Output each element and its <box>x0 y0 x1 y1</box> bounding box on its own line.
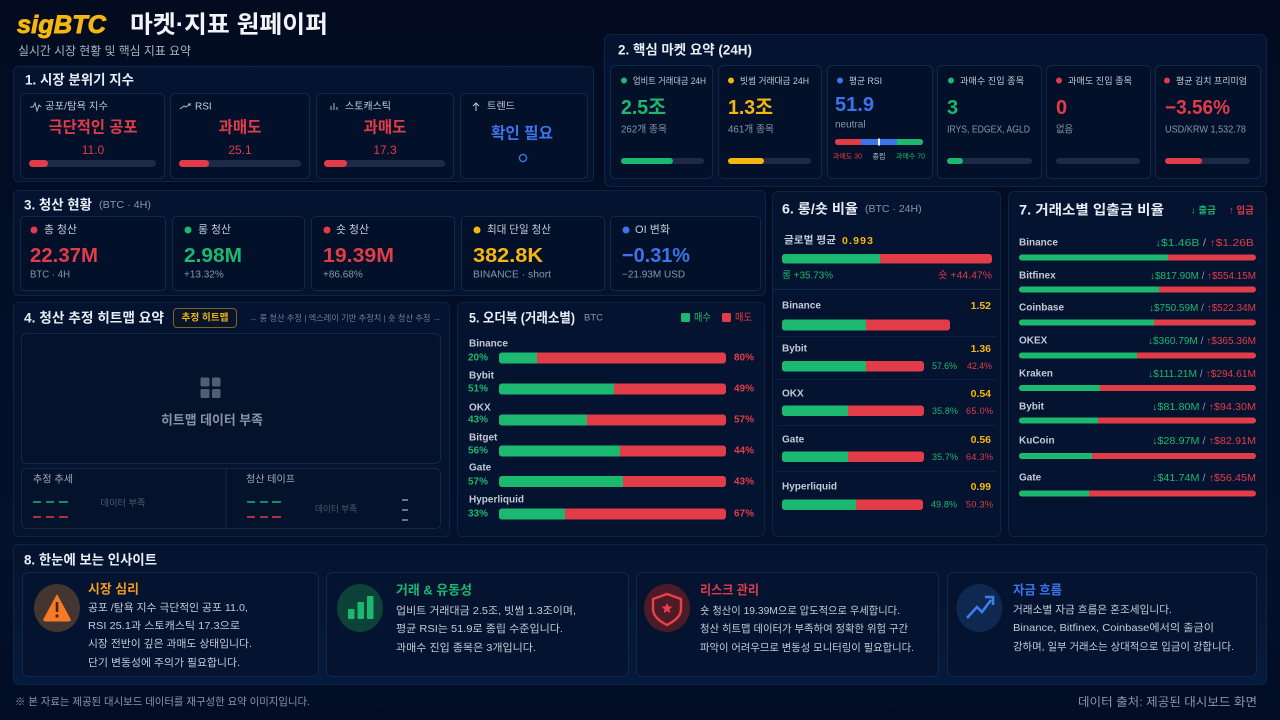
card: short liquidation <box>312 216 454 290</box>
card: largest single liquidation: BINANCE · short <box>473 270 551 280</box>
row: OKX: OKX <box>782 388 804 400</box>
logo: sigBTC <box>17 11 107 39</box>
card: overbought entries: IRYS, EDGEX, AGLD <box>947 124 1030 136</box>
card: upbit volume: 업비트 거래대금 24H <box>633 76 706 86</box>
row: OKEX <box>1019 336 1256 358</box>
card: RSI: 과매도 <box>218 118 262 136</box>
row: Hyperliquid <box>468 494 754 520</box>
card: trend <box>460 94 588 178</box>
row: Gate: 43% <box>734 476 754 488</box>
panel: estimated trend and liquidation tape: 데이터 부족 <box>315 504 357 514</box>
heading: section 2: 2. 핵심 마켓 요약 (24H) <box>618 42 752 58</box>
row: Bitfinex: Bitfinex <box>1019 270 1056 282</box>
card: stochastic: 과매도 <box>364 118 407 136</box>
footer source: 데이터 출처: 제공된 대시보드 화면 <box>1078 695 1257 709</box>
panel: market mood index <box>14 66 594 182</box>
card: fund flow <box>948 572 1256 676</box>
card: short liquidation: 숏 청산 <box>336 223 369 236</box>
heading: section 3 <box>24 198 151 212</box>
panel: estimated trend and liquidation tape <box>22 468 440 528</box>
row: Coinbase: ↓$750.59M / ↑$522.34M <box>1149 302 1256 314</box>
card: trading and liquidity: 거래 & 유동성 <box>396 582 472 598</box>
row: Hyperliquid: 0.99 <box>971 481 991 493</box>
row: Binance: 1.52 <box>971 300 991 312</box>
row: Hyperliquid: 67% <box>734 508 754 520</box>
row: Bybit: 42.4% <box>967 361 992 371</box>
card: fund flow: 자금 흐름 <box>1013 582 1062 598</box>
card: fund flow: Binance, Bitfinex, Coinbase에서의 출금이 <box>1013 622 1214 634</box>
heading: section 1: 1. 시장 분위기 지수 <box>25 72 134 88</box>
row: Gate <box>782 434 993 462</box>
heading: section 4: 4. 청산 추정 히트맵 요약 <box>24 310 164 326</box>
card: risk management: 숏 청산이 19.39M으로 압도적으로 우세합니다. <box>700 604 900 617</box>
icon: heatmap grid <box>200 378 220 398</box>
row: Bybit: 51% <box>468 384 488 394</box>
icon: bar chart <box>337 584 383 632</box>
row: Gate: 57% <box>468 476 488 488</box>
panel: liquidation status <box>14 190 766 296</box>
row: Bitfinex <box>1019 270 1256 292</box>
row: Kraken <box>1019 368 1256 391</box>
heading: section 3: 3. 청산 현황 <box>24 198 93 212</box>
card: market sentiment: 공포 /탐욕 지수 극단적인 공포 11.0, <box>88 602 248 614</box>
heading: section 7: 7. 거래소별 입출금 비율 <box>1019 202 1164 218</box>
row: Bybit <box>468 370 754 394</box>
row: Hyperliquid <box>782 481 993 510</box>
row: OKX: 0.54 <box>971 388 991 400</box>
card: total liquidation <box>20 216 166 290</box>
card: total liquidation: 22.37M <box>30 244 98 267</box>
row: Gate: Gate <box>1019 472 1042 484</box>
row: Gate: 64.3% <box>966 452 993 462</box>
global average: 숏 +44.47% <box>938 270 992 282</box>
card: OI change: −21.93M USD <box>622 270 685 280</box>
card: market sentiment: 시장 전반이 깊은 과매도 상태입니다. <box>88 637 252 650</box>
heading: section 6: (BTC · 24H) <box>865 203 922 215</box>
row: Bybit: Bybit <box>1019 402 1045 412</box>
heading: section 3: (BTC · 4H) <box>99 199 151 211</box>
badge: estimated heatmap <box>174 308 236 328</box>
legend: buy and sell <box>681 312 752 324</box>
row: Coinbase <box>1019 302 1256 326</box>
panel: liquidation heatmap summary <box>14 302 450 536</box>
row: OKX <box>782 388 993 416</box>
card: average RSI: 종립 <box>873 152 885 160</box>
card: OI change <box>610 216 760 290</box>
card: stochastic <box>316 94 454 178</box>
card: average RSI <box>828 66 932 178</box>
card: oversold entries: 과매도 진입 종목 <box>1068 75 1132 86</box>
row: Gate: ↓$41.74M / ↑$56.45M <box>1152 472 1256 484</box>
row: OKX: 65.0% <box>966 406 993 416</box>
card: short liquidation: +86.68% <box>323 270 363 280</box>
card: average RSI: 평균 RSI <box>849 76 882 86</box>
card: bithumb volume: 1.3조 <box>728 97 773 119</box>
card: long liquidation: +13.32% <box>184 270 224 280</box>
row: Binance <box>1019 238 1256 260</box>
card: short liquidation: 19.39M <box>323 244 394 267</box>
legend: outflow and inflow <box>1191 204 1254 216</box>
row: Hyperliquid: 49.8% <box>931 500 957 510</box>
card: risk management: 리스크 관리 <box>700 582 759 598</box>
card: kimchi premium: −3.56% <box>1165 97 1230 119</box>
row: Bybit: 57.6% <box>932 361 957 371</box>
footer note: ※ 본 자료는 제공된 대시보드 데이터를 재구성한 요약 이미지입니다. <box>15 695 310 708</box>
row: OKEX: OKEX <box>1019 336 1048 346</box>
row: Binance: Binance <box>469 338 508 350</box>
card: upbit volume <box>610 66 712 178</box>
card: overbought entries: 3 <box>947 97 958 119</box>
row: Kraken: ↓$111.21M / ↑$294.61M <box>1148 368 1256 380</box>
row: Coinbase: Coinbase <box>1019 302 1064 314</box>
card: market sentiment: 단기 변동성에 주의가 필요합니다. <box>88 657 240 669</box>
card: trading and liquidity: 평균 RSI는 51.9로 종립 수준입니다. <box>396 622 563 635</box>
card: upbit volume: 262개 종목 <box>621 124 667 136</box>
row: Hyperliquid: 33% <box>468 508 488 520</box>
card: risk management: 청산 히트맵 데이터가 부족하여 정확한 위험 구간 <box>700 622 908 635</box>
row: Bybit: ↓$81.80M / ↑$94.30M <box>1152 402 1256 412</box>
card: fear and greed: 공포/탐욕 지수 <box>45 100 108 112</box>
card: long liquidation: 롱 청산 <box>198 223 231 236</box>
icon: trend arrow <box>956 584 1002 632</box>
row: Kraken: Kraken <box>1019 368 1053 380</box>
card: kimchi premium <box>1156 66 1260 178</box>
global average: 롱 +35.73% <box>782 270 833 282</box>
card: kimchi premium: 평균 김치 프리미엄 <box>1176 75 1247 86</box>
row: Binance <box>468 338 754 364</box>
global average: 글로벌 평균 <box>784 234 836 246</box>
panel: estimated trend and liquidation tape: 데이터 부족 <box>100 498 146 508</box>
card: average RSI: 51.9 <box>835 94 874 116</box>
panel: insights at a glance <box>14 544 1266 684</box>
row: Bitget <box>468 432 754 456</box>
panel: estimated trend and liquidation tape: 청산 테이프 <box>246 474 295 486</box>
row: Binance <box>782 300 991 330</box>
card: stochastic: 스토캐스틱 <box>345 100 391 112</box>
row: Hyperliquid: Hyperliquid <box>782 482 837 492</box>
heatmap placeholder: 히트맵 데이터 부족 <box>161 412 263 428</box>
row: Gate <box>1019 472 1256 496</box>
row: Bybit: 49% <box>734 384 754 394</box>
row: Gate: 35.7% <box>932 452 958 462</box>
row: OKX: 57% <box>734 414 754 426</box>
row: Hyperliquid: Hyperliquid <box>469 494 524 506</box>
card: trading and liquidity: 업비트 거래대금 2.5조, 빗썸 1.3조이며, <box>396 604 576 617</box>
row: KuCoin: ↓$28.97M / ↑$82.91M <box>1152 436 1256 446</box>
card: fund flow: 강하며, 일부 거래소는 상대적으로 입금이 강합니다. <box>1013 640 1234 653</box>
heading: section 6: 6. 롱/숏 비율 <box>782 202 858 216</box>
icon: warning <box>34 584 80 632</box>
global average <box>782 234 992 282</box>
card: risk management: 파악이 어려우므로 변동성 모니터링이 필요합니다. <box>700 642 914 654</box>
card: RSI: 25.1 <box>228 143 252 157</box>
row: Gate: 0.56 <box>971 434 991 446</box>
card: total liquidation: 총 청산 <box>44 223 77 236</box>
card: stochastic: 17.3 <box>373 143 397 157</box>
panel: core market summary <box>604 34 1266 186</box>
card: bithumb volume <box>718 66 822 178</box>
heading: section 6 <box>782 202 922 216</box>
card: largest single liquidation: 최대 단일 청산 <box>487 222 551 236</box>
card: largest single liquidation <box>462 216 604 290</box>
card: long liquidation: 2.98M <box>184 244 242 267</box>
card: overbought entries: 과매수 진입 종목 <box>960 75 1024 86</box>
card: long liquidation <box>172 216 304 290</box>
heading: section 5: 5. 오더북 (거래소별) <box>469 310 575 326</box>
card: kimchi premium: USD/KRW 1,532.78 <box>1165 124 1246 136</box>
legend note: → 롱 청산 추정 | 엑스레이 기반 추정치 | 숏 청산 추정 → <box>249 313 441 323</box>
card: RSI: RSI <box>195 102 212 112</box>
card: bithumb volume: 461개 종목 <box>728 124 774 136</box>
row: Binance: ↓$1.46B / ↑$1.26B <box>1155 238 1254 248</box>
card: fund flow: 거래소별 자금 흐름은 혼조세입니다. <box>1013 603 1172 616</box>
global average: 0.993 <box>842 235 873 247</box>
row: OKX: OKX <box>469 402 491 414</box>
row: OKEX: ↓$360.79M / ↑$365.36M <box>1148 336 1256 346</box>
card: OI change: OI 변화 <box>635 223 670 236</box>
card: oversold entries: 0 <box>1056 97 1067 119</box>
card: overbought entries <box>938 66 1042 178</box>
card: fear and greed: 극단적인 공포 <box>48 118 138 136</box>
row: Bybit: 1.36 <box>971 343 991 355</box>
legend: buy and sell: 매수 <box>694 312 711 324</box>
card: trading and liquidity <box>326 572 628 676</box>
icon: shield <box>644 584 690 632</box>
row: Bybit: Bybit <box>782 344 808 354</box>
subtitle: 실시간 시장 현황 및 핵심 지표 요약 <box>18 43 191 58</box>
row: KuCoin <box>1019 436 1256 459</box>
row: Hyperliquid: 50.3% <box>966 500 993 510</box>
legend: outflow and inflow: ↑ 입금 <box>1229 204 1254 216</box>
card: oversold entries <box>1046 66 1150 178</box>
card: trend: 트렌드 <box>487 100 515 112</box>
row: OKX: 35.8% <box>932 406 958 416</box>
card: market sentiment: RSI 25.1과 스토캐스틱 17.3으로 <box>88 620 240 632</box>
row: OKX: 43% <box>468 414 488 426</box>
card: fear and greed <box>20 94 164 178</box>
card: average RSI: 과매수 70 <box>896 152 925 160</box>
card: OI change: −0.31% <box>622 244 690 267</box>
heatmap placeholder <box>22 334 440 464</box>
badge: estimated heatmap: 추정 히트맵 <box>182 312 228 324</box>
row: Bybit <box>782 343 992 372</box>
card: risk management <box>636 572 938 676</box>
card: trend: 확인 필요 <box>491 124 553 142</box>
row: Bitget: 44% <box>734 446 754 456</box>
card: oversold entries: 없음 <box>1056 122 1073 136</box>
row: Gate <box>468 462 754 488</box>
heading: section 5: BTC <box>584 312 603 324</box>
card: RSI <box>170 94 310 178</box>
row: Bybit <box>1019 402 1256 424</box>
panel: estimated trend and liquidation tape: 추정 추세 <box>33 474 73 486</box>
row: Bitfinex: ↓$817.90M / ↑$554.15M <box>1150 270 1256 282</box>
row: KuCoin: KuCoin <box>1019 436 1055 446</box>
row: Gate: Gate <box>782 434 805 446</box>
row: Bybit: Bybit <box>469 370 495 382</box>
card: largest single liquidation: 382.8K <box>473 244 543 267</box>
card: average RSI: neutral <box>835 120 866 130</box>
panel: order book <box>458 302 764 536</box>
row: OKX <box>468 402 754 426</box>
card: average RSI: 과매도 30 <box>833 152 862 160</box>
card: market sentiment: 시장 심리 <box>88 582 139 596</box>
legend: buy and sell: 매도 <box>735 312 752 324</box>
title: 마켓·지표 원페이퍼 <box>130 12 328 38</box>
card: bithumb volume: 빗썸 거래대금 24H <box>740 76 809 86</box>
panel: long short ratio <box>772 192 1000 536</box>
legend: outflow and inflow: ↓ 출금 <box>1191 206 1216 216</box>
heading: section 8: 8. 한눈에 보는 인사이트 <box>24 552 157 568</box>
card: upbit volume: 2.5조 <box>621 97 666 119</box>
row: Bitget: Bitget <box>469 432 498 444</box>
row: Binance: 20% <box>468 352 488 364</box>
row: Bitget: 56% <box>468 446 488 456</box>
card: market sentiment <box>22 572 318 676</box>
row: Binance: Binance <box>782 300 821 312</box>
card: trading and liquidity: 과매수 진입 종목은 3개입니다. <box>396 641 536 654</box>
card: fear and greed: 11.0 <box>82 143 105 157</box>
row: Gate: Gate <box>469 462 492 474</box>
row: Binance: Binance <box>1019 238 1058 248</box>
panel: exchange flow ratio <box>1008 192 1266 536</box>
row: Binance: 80% <box>734 352 754 364</box>
card: total liquidation: BTC · 4H <box>30 270 70 280</box>
